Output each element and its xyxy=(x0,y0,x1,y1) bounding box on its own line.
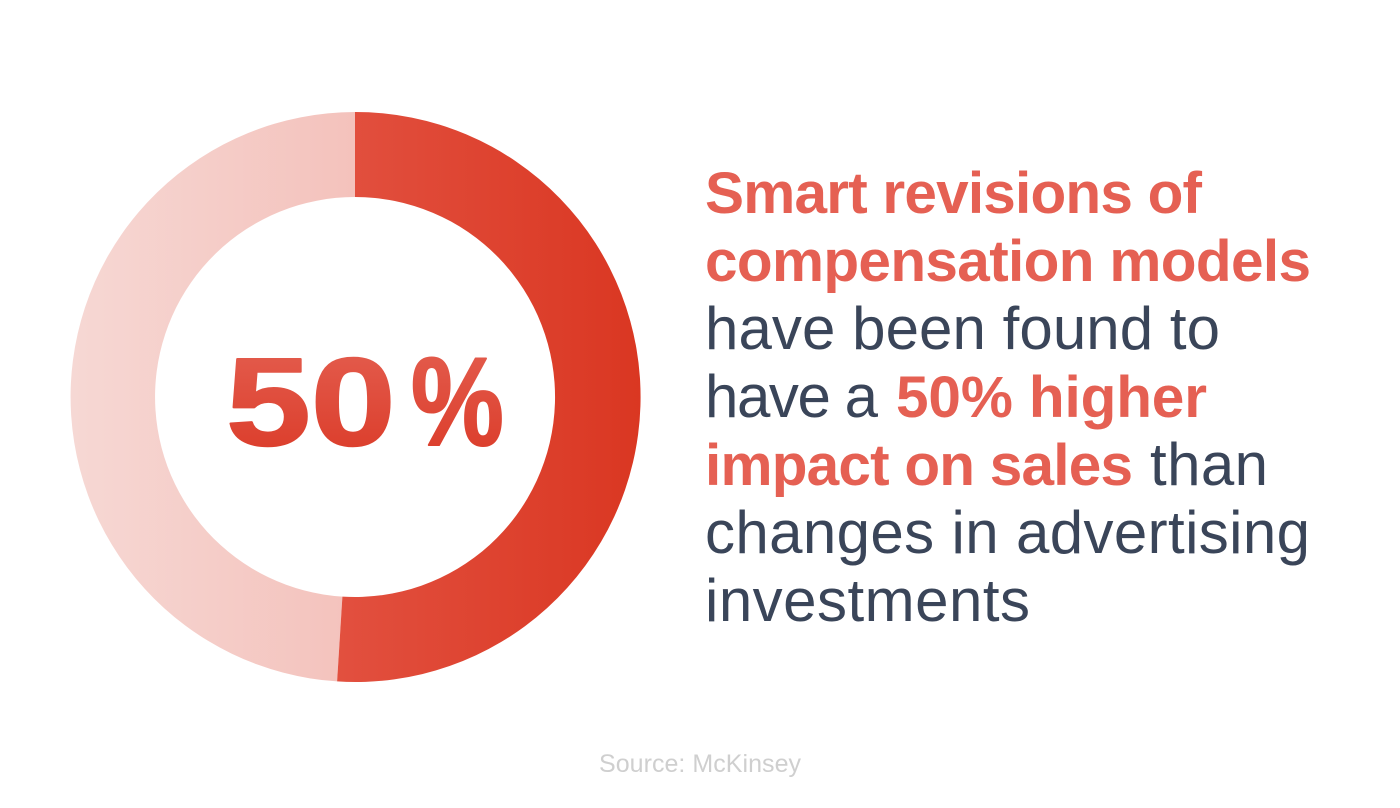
donut centre value xyxy=(226,332,504,472)
statement text block xyxy=(705,161,1311,634)
donut chart xyxy=(71,112,641,682)
statement text block: Smart revisions of xyxy=(705,161,1203,226)
statement text block: 50% higher xyxy=(896,365,1207,430)
statement text block: investments xyxy=(705,567,1030,634)
donut 50% segment xyxy=(337,112,641,682)
donut centre value: % xyxy=(411,333,504,472)
statement text block: than xyxy=(1150,431,1268,498)
statement text block: impact on sales xyxy=(705,433,1133,498)
donut centre value: 50 xyxy=(226,332,396,472)
source note: Source: McKinsey xyxy=(599,750,802,778)
statement text block: compensation models xyxy=(705,229,1311,294)
statement text block: have been found to xyxy=(705,295,1220,362)
statement text block: have a xyxy=(705,363,879,430)
statement text block: changes in advertising xyxy=(705,499,1310,566)
donut remainder segment xyxy=(71,112,355,681)
